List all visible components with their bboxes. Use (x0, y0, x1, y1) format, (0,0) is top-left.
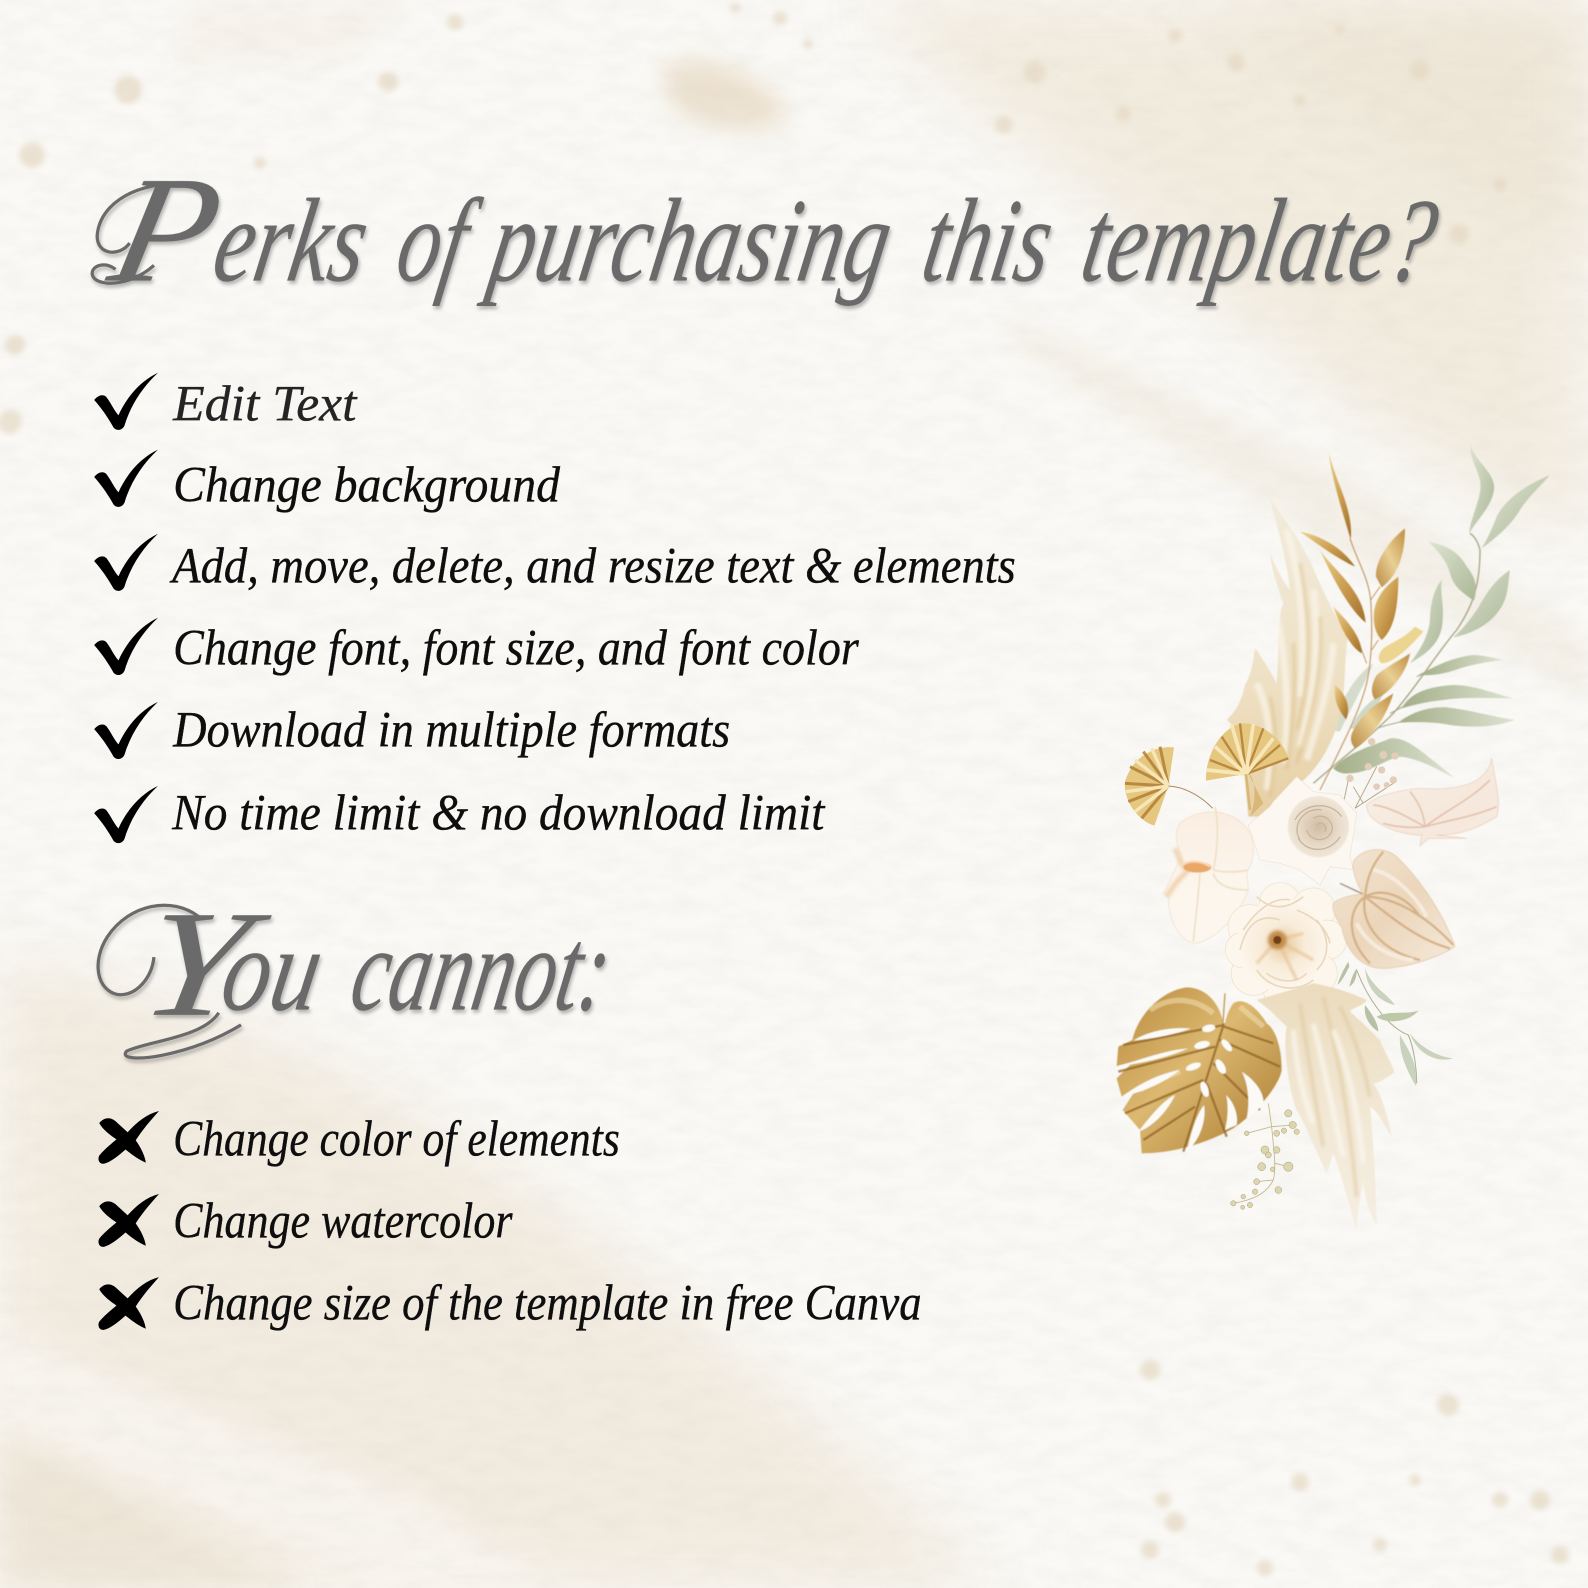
floral bouquet illustration (1117, 443, 1550, 1230)
heading: perks of purchasing this template: erks (205, 175, 378, 307)
item: change watercolor: Change watercolor (173, 1193, 513, 1249)
pale pink anthurium leaf (1367, 758, 1498, 846)
cream orchid (1163, 807, 1253, 943)
heading: perks of purchasing this template: template? (1073, 175, 1447, 307)
item: change color of elements: Change color of elements (173, 1111, 620, 1167)
berry sprig (1231, 1103, 1299, 1209)
golden monstera leaf (1117, 987, 1282, 1153)
lower pampas grass (1257, 983, 1394, 1230)
list: allowed features (94, 373, 1016, 843)
heading: perks of purchasing this template (92, 146, 1447, 314)
tan anthurium heart leaf (1333, 850, 1455, 968)
heading: you cannot (98, 881, 621, 1058)
heading: you cannot: ou (213, 905, 333, 1037)
item: add move delete resize: Add, move, delete, and resize text & elements (169, 537, 1016, 593)
heading: you cannot: cannot: (343, 905, 621, 1037)
heading: you cannot: Y (131, 881, 278, 1049)
item: change size of template: Change size of the template in free Canva (173, 1275, 922, 1331)
ginkgo leaf left (1125, 747, 1213, 826)
lower green sprigs (1337, 962, 1453, 1086)
white rose (1248, 777, 1357, 885)
item: change background: Change background (173, 456, 561, 512)
item: edit text: Edit Text (172, 375, 358, 431)
cream peony (1225, 883, 1347, 1010)
upper pampas grass (1227, 498, 1348, 817)
item: no limits: No time limit & no download limit (171, 784, 826, 840)
heading: perks of purchasing this template: of (388, 175, 489, 307)
baby's breath sprig (1343, 738, 1399, 808)
heading: perks of purchasing this template: this (914, 175, 1063, 307)
item: change font: Change font, font size, and font color (173, 619, 859, 675)
heading: perks of purchasing this template: P (97, 146, 235, 314)
list: not allowed (98, 1111, 922, 1331)
golden oat grains (1300, 453, 1423, 790)
item: download formats: Download in multiple formats (172, 701, 730, 757)
item: edit text (94, 373, 358, 431)
heading: perks of purchasing this template: purchasing (475, 175, 902, 307)
main content column (92, 146, 1447, 1331)
eucalyptus branch (1313, 443, 1550, 783)
ginkgo leaf right (1206, 723, 1288, 810)
